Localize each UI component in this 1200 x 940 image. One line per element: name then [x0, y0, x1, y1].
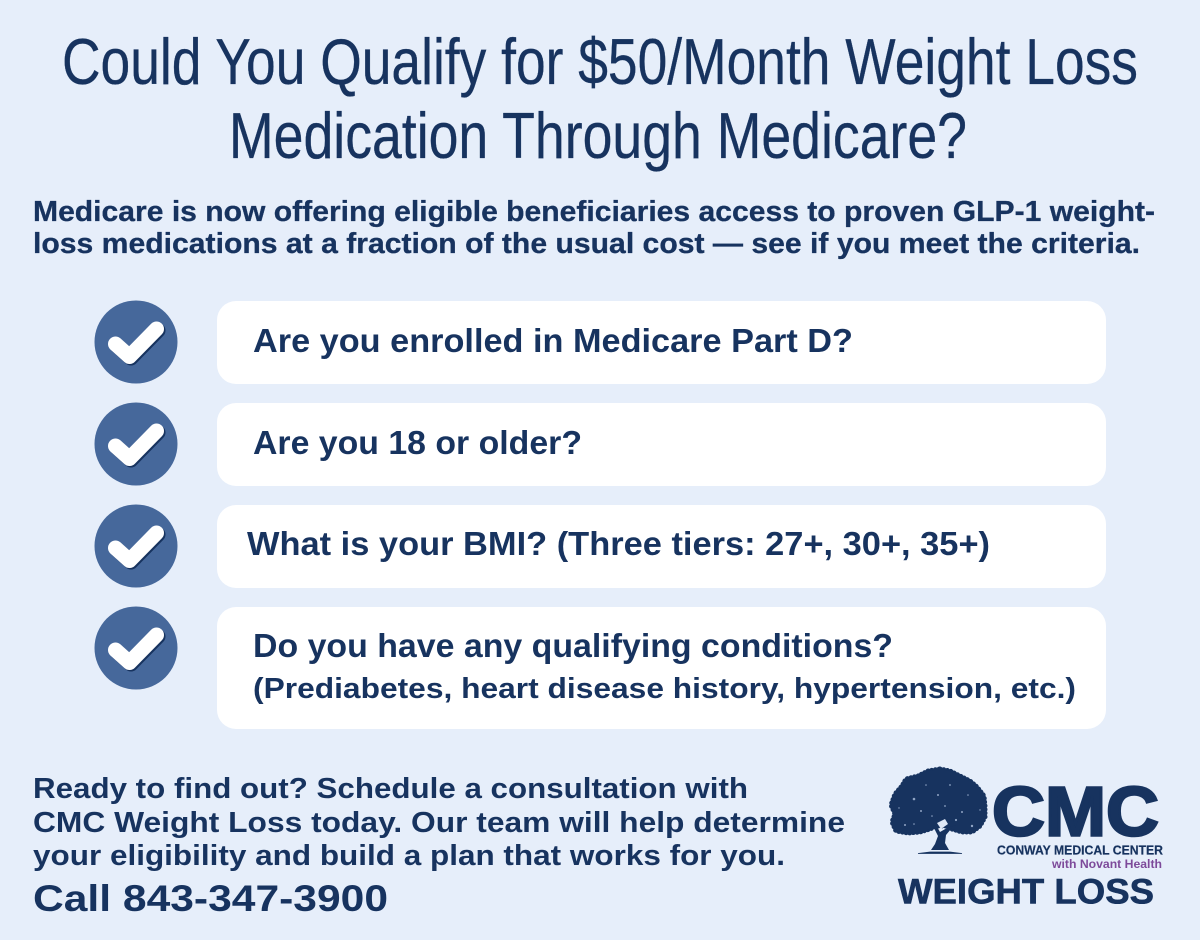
question card 2	[217, 403, 1106, 486]
icon: check 2	[94, 402, 178, 486]
icon: tree	[891, 769, 985, 854]
checklist item 4	[94, 606, 1106, 729]
question card 3	[217, 505, 1106, 588]
subtitle: Medicare is now offering eligible beneficiaries access to proven GLP-1 weight-	[33, 196, 1155, 228]
question card 4	[217, 607, 1106, 729]
question card 4: (Prediabetes, heart disease history, hypertension, etc.)	[253, 673, 1076, 705]
checklist item 3	[94, 504, 1106, 588]
question card 4: Do you have any qualifying conditions?	[253, 627, 893, 664]
call to action text: Ready to find out? Schedule a consultation with	[33, 773, 748, 805]
subtitle	[33, 196, 1155, 260]
icon: check 3	[94, 504, 178, 588]
question card 2: Are you 18 or older?	[253, 424, 582, 461]
title	[62, 25, 1138, 172]
logo partner: with Novant Health	[1051, 857, 1162, 871]
logo wordmark CMC: CMC	[992, 772, 1159, 850]
call to action text	[33, 773, 845, 872]
title: Medication Through Medicare?	[229, 99, 967, 172]
question card 1	[217, 301, 1106, 384]
logo subtitle: CONWAY MEDICAL CENTER	[997, 842, 1164, 858]
logo weight loss: WEIGHT LOSS	[898, 872, 1154, 912]
icon: check 1	[94, 300, 178, 384]
call to action text: your eligibility and build a plan that works for you.	[33, 840, 785, 872]
phone number: Call 843-347-3900	[33, 878, 388, 919]
icon: check 4	[94, 606, 178, 690]
call to action text: CMC Weight Loss today. Our team will help determine	[33, 807, 845, 839]
checklist item 2	[94, 402, 1106, 486]
question card 3: What is your BMI? (Three tiers: 27+, 30+, 35+)	[247, 525, 990, 562]
subtitle: loss medications at a fraction of the usual cost — see if you meet the criteria.	[33, 228, 1140, 260]
logo: CMC Weight Loss	[891, 769, 1164, 912]
checklist item 1	[94, 300, 1106, 384]
question card 1: Are you enrolled in Medicare Part D?	[253, 322, 853, 359]
